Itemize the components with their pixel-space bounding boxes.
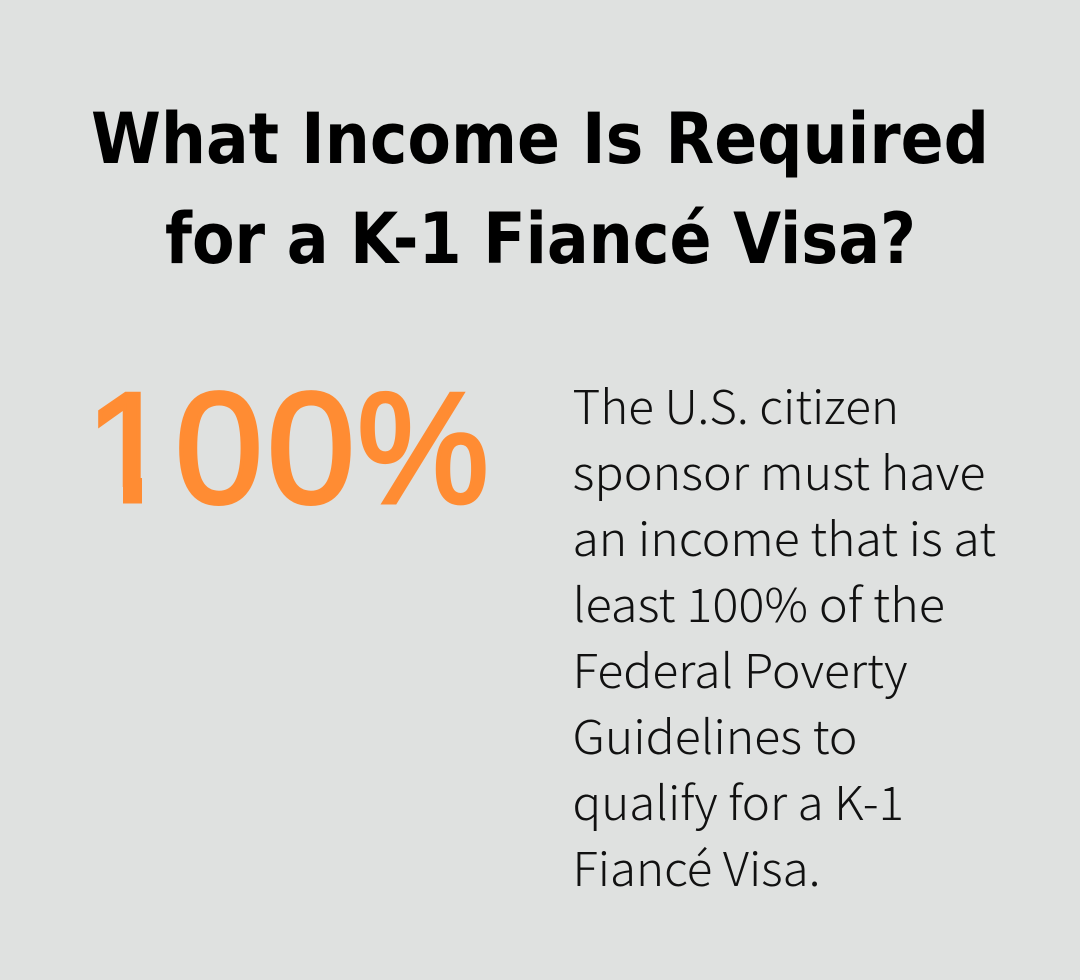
big number: 100%: 0 <box>175 360 263 536</box>
body text: Federal Poverty <box>572 635 908 702</box>
body text: an income that is at <box>572 503 996 570</box>
body text <box>572 371 996 900</box>
title: for a K-1 Fiancé Visa? <box>165 198 916 280</box>
big number: 100%: 0 <box>267 360 355 536</box>
body text: Guidelines to <box>572 701 858 768</box>
big number: 100%: % <box>357 360 489 536</box>
body text: Fiancé Visa. <box>572 833 820 900</box>
body text: The U.S. citizen <box>572 371 899 438</box>
title <box>91 98 989 280</box>
big number: 100%: 1 <box>85 360 173 536</box>
body text: sponsor must have <box>572 437 986 504</box>
big number: 100% <box>98 390 486 506</box>
title: What Income Is Required <box>91 98 989 180</box>
body text: least 100% of the <box>572 569 945 636</box>
body text: qualify for a K-1 <box>572 767 904 834</box>
